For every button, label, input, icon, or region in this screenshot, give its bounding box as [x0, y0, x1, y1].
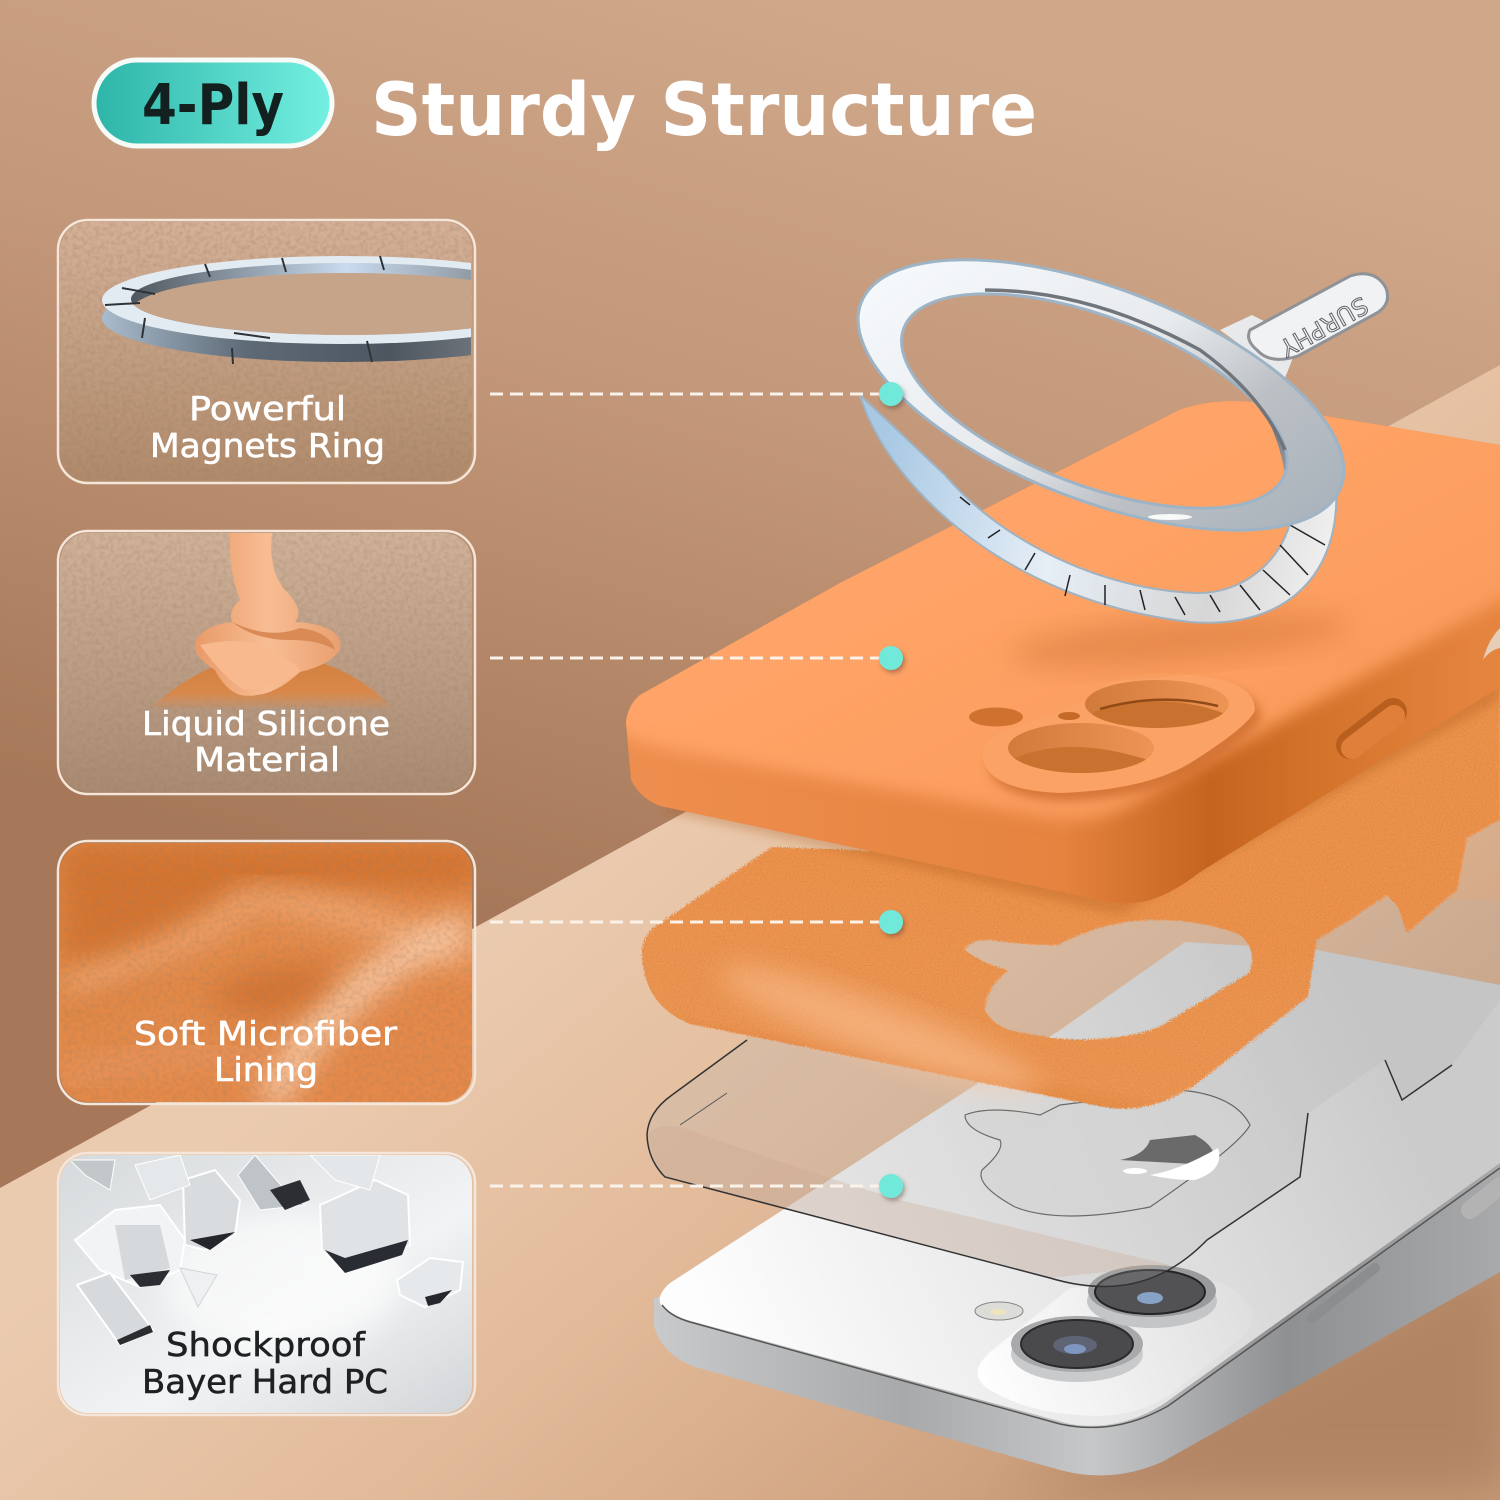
panel: liquid silicone material	[58, 531, 475, 794]
lens: upper	[1087, 1265, 1217, 1328]
label: Powerful Magnets Ring	[150, 389, 385, 465]
flash	[975, 1302, 1023, 1320]
front magnet band	[860, 395, 1336, 623]
label: Soft Microfiber Lining: Lining	[214, 1050, 318, 1089]
layer: iPhone body	[654, 942, 1500, 1475]
background: lighter diagonal band	[0, 365, 1500, 1500]
flash opening	[969, 708, 1023, 726]
label: Liquid Silicone Material: Liquid Silicone	[142, 704, 390, 743]
ring shadow on case	[1009, 603, 1351, 677]
apple logo on phone	[1120, 1135, 1219, 1180]
phone side wall	[654, 1150, 1500, 1475]
camera plateau	[978, 1280, 1252, 1416]
label: Powerful Magnets Ring: Powerful	[189, 389, 346, 428]
crystals	[70, 1155, 463, 1350]
mic opening	[1058, 712, 1080, 720]
layer: silicone case	[600, 380, 1500, 920]
label: Powerful Magnets Ring: Magnets Ring	[150, 426, 385, 465]
callout: magnets ring connector	[490, 382, 903, 406]
title pill: 4-Ply	[94, 60, 332, 146]
callout: hard PC connector	[490, 1174, 903, 1198]
SURPHY tab	[1220, 274, 1388, 378]
silicone side wall	[600, 380, 1500, 920]
camera opening 1	[1085, 680, 1229, 730]
camera island shadow	[988, 681, 1261, 801]
side buttons	[1312, 1268, 1375, 1318]
label: Shockproof Bayer Hard PC	[142, 1325, 388, 1401]
side button cover	[1350, 712, 1394, 748]
label: Liquid Silicone Material	[142, 704, 390, 779]
phone back glass	[660, 942, 1500, 1426]
lining highlight	[711, 947, 1049, 1113]
lens flare	[1148, 514, 1192, 520]
lens: lower	[1011, 1316, 1143, 1382]
callout: silicone connector	[490, 646, 903, 670]
plate inner bevel	[985, 290, 1285, 450]
label: Liquid Silicone Material: Material	[194, 740, 340, 779]
metal plate	[823, 204, 1379, 586]
fabric folds	[60, 843, 480, 1102]
camera opening 2	[1008, 723, 1154, 776]
back magnets	[1226, 355, 1310, 490]
layer: magnetic ring	[823, 204, 1388, 623]
panel: soft microfiber lining	[58, 841, 480, 1104]
layer: clear PC shell	[647, 900, 1500, 1286]
panel: shockproof bayer hard PC	[58, 1153, 475, 1415]
icon: silicone pour	[150, 533, 393, 708]
icon: segmented magnet ring	[102, 256, 471, 364]
callout: microfiber connector	[490, 910, 903, 934]
silicone back surface	[600, 380, 1500, 820]
layer: microfiber lining	[642, 655, 1500, 1109]
label: Soft Microfiber Lining	[134, 1014, 397, 1089]
title: Sturdy Structure: Sturdy Structure	[371, 68, 1037, 153]
title pill: 4-Ply: 4-Ply	[142, 73, 284, 138]
silicone body	[600, 380, 1500, 920]
phone cast shadow	[1000, 1230, 1500, 1500]
label: Shockproof Bayer Hard PC: Bayer Hard PC	[142, 1362, 388, 1401]
side notch	[1483, 628, 1500, 660]
label: Soft Microfiber Lining: Soft Microfiber	[134, 1014, 397, 1053]
shell camera cutout	[965, 1090, 1250, 1216]
phone edge lines	[662, 1168, 1500, 1427]
SURPHY tab: SURPHY	[1275, 291, 1373, 362]
silicone shadow on lining	[660, 680, 1500, 915]
label: Shockproof Bayer Hard PC: Shockproof	[166, 1325, 366, 1364]
silicone camera island	[982, 673, 1255, 793]
panel: powerful magnets ring	[56, 218, 476, 484]
